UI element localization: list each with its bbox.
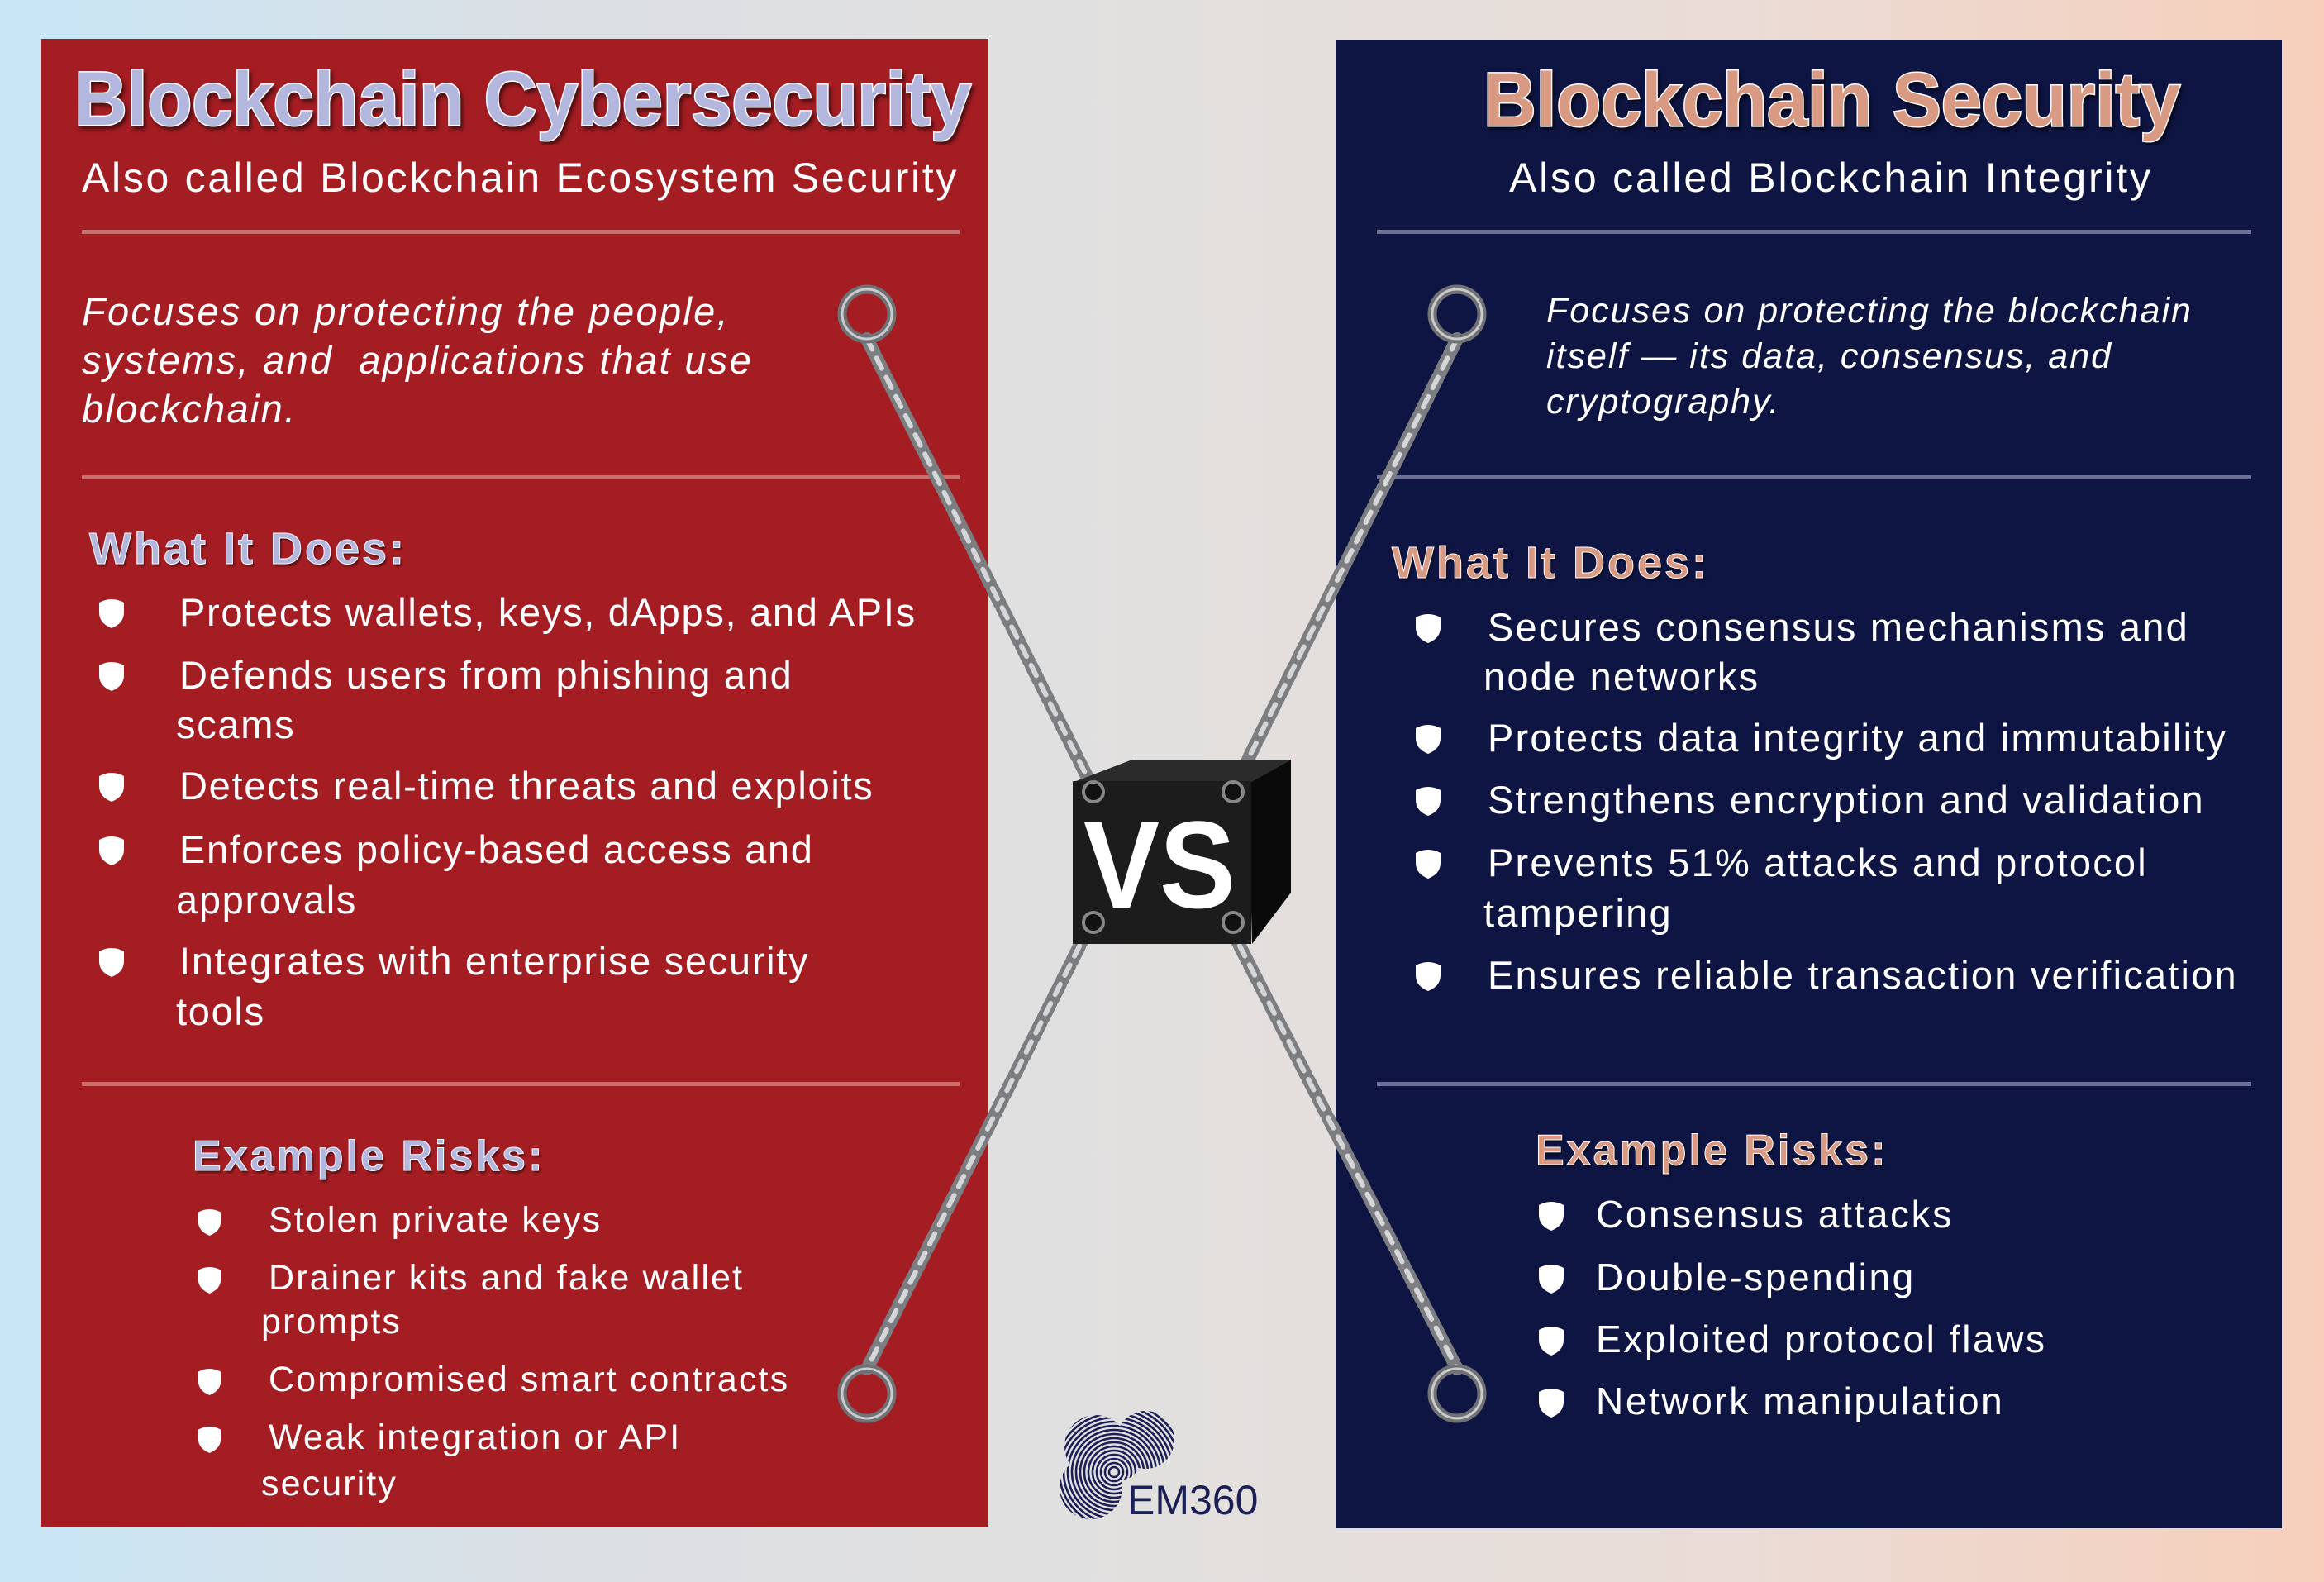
- list: what it does: Protects data integrity and immutability: [1488, 716, 2227, 760]
- list: example risks: prompts: [261, 1302, 402, 1341]
- list: what it does: Protects wallets, keys, dApps, and APIs: [179, 590, 917, 634]
- list: example risks: Consensus attacks: [1596, 1193, 1954, 1236]
- heading: example risks: Example Risks:: [1536, 1127, 1888, 1175]
- list: what it does: tools: [176, 989, 265, 1033]
- list: example risks: Exploited protocol flaws: [1596, 1318, 2047, 1360]
- list: what it does: Defends users from phishing and: [179, 653, 793, 697]
- list: example risks: [198, 1200, 789, 1503]
- list: what it does: approvals: [176, 878, 357, 922]
- list: example risks: [1539, 1193, 2047, 1422]
- list: what it does: [1416, 605, 2238, 997]
- description: itself — its data, consensus, and: [1546, 336, 2112, 376]
- list: what it does: tampering: [1483, 891, 1673, 935]
- title: Blockchain Security: [1483, 58, 2180, 142]
- cube: [1076, 760, 1291, 784]
- description: [1546, 291, 2193, 422]
- panel: blockchain cybersecurity: [41, 39, 988, 1527]
- description: systems, and applications that use: [82, 338, 753, 382]
- list: what it does: [99, 590, 917, 1033]
- list: example risks: Compromised smart contracts: [269, 1360, 789, 1399]
- subtitle: Also called Blockchain Integrity: [1509, 155, 2153, 201]
- list: example risks: Stolen private keys: [269, 1200, 602, 1240]
- description: Focuses on protecting the people,: [82, 289, 730, 333]
- heading: example risks: Example Risks:: [193, 1132, 545, 1180]
- list: what it does: node networks: [1483, 655, 1760, 698]
- subtitle: Also called Blockchain Ecosystem Security: [82, 155, 959, 201]
- list: what it does: Ensures reliable transaction verification: [1488, 953, 2238, 997]
- panel: blockchain security: [1336, 40, 2282, 1528]
- list: example risks: Network manipulation: [1596, 1379, 2004, 1422]
- list: example risks: Double-spending: [1596, 1256, 1916, 1298]
- list: what it does: Secures consensus mechanisms and: [1488, 605, 2189, 649]
- list: example risks: Drainer kits and fake wallet: [269, 1258, 744, 1298]
- list: what it does: Integrates with enterprise security: [179, 939, 809, 983]
- list: what it does: Prevents 51% attacks and protocol: [1488, 841, 2148, 884]
- list: what it does: Strengthens encryption and validation: [1488, 778, 2205, 822]
- list: what it does: scams: [176, 703, 295, 746]
- description: blockchain.: [82, 387, 297, 431]
- description: Focuses on protecting the blockchain: [1546, 291, 2193, 331]
- list: example risks: security: [261, 1464, 398, 1503]
- description: [82, 289, 753, 431]
- list: what it does: Enforces policy-based access and: [179, 827, 814, 871]
- list: what it does: Detects real-time threats and exploits: [179, 764, 874, 808]
- logo: EM360: [1060, 1411, 1258, 1523]
- icon: chains and VS cube: VS: [1083, 795, 1236, 934]
- description: cryptography.: [1546, 382, 1780, 422]
- logo: EM360: EM360: [1127, 1477, 1258, 1523]
- heading: what it does: What It Does:: [1392, 538, 1709, 588]
- list: example risks: Weak integration or API: [269, 1418, 681, 1457]
- heading: what it does: What It Does:: [89, 524, 407, 574]
